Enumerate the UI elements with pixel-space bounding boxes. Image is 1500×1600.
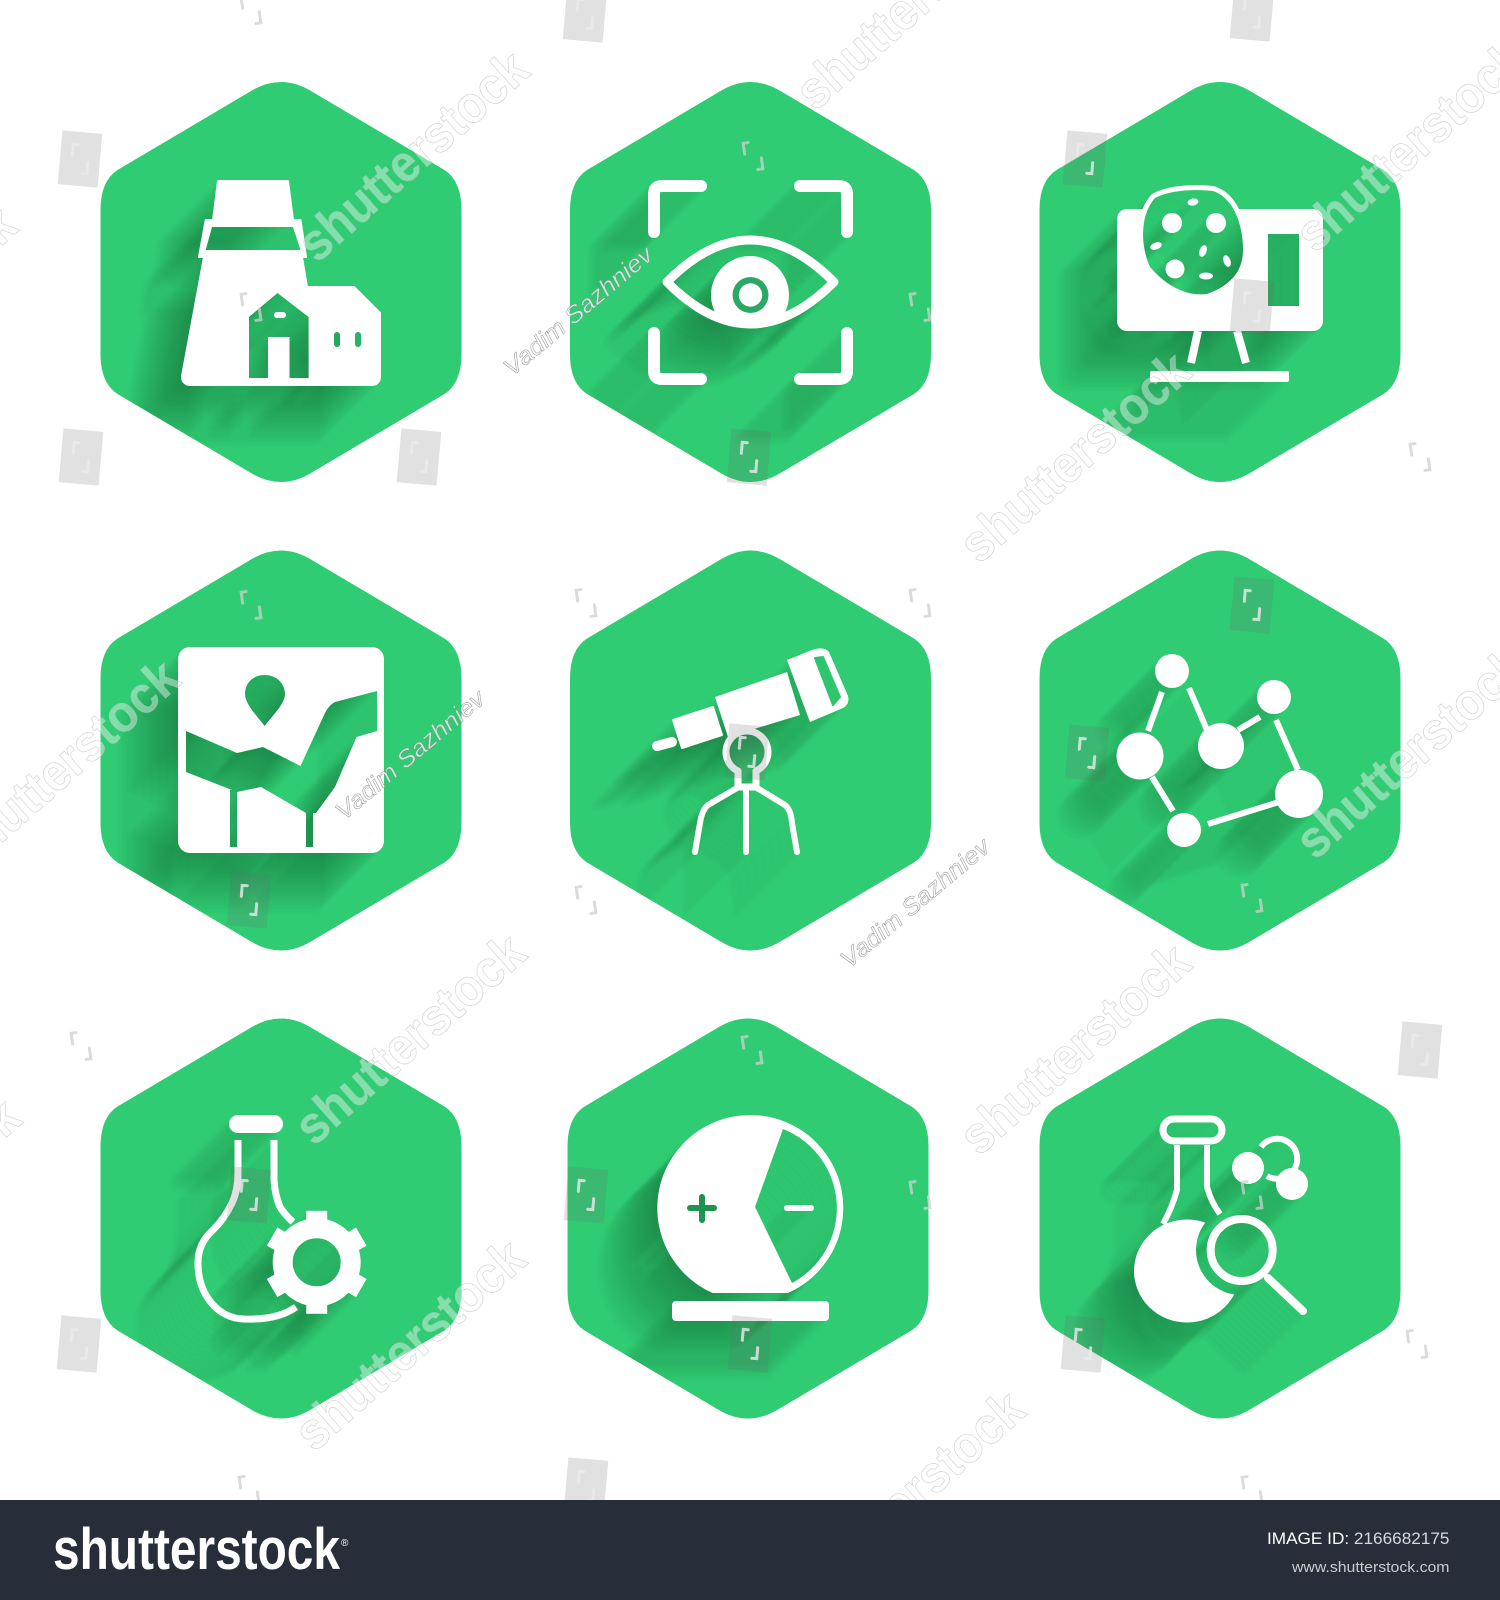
long shadow (654, 186, 847, 379)
long shadow (198, 1115, 367, 1319)
watermark: photographer name: Vadim Sazhniev (331, 684, 492, 826)
watermark: shutterstock diagonal text: shutterstock (287, 39, 540, 273)
watermark: shutterstock diagonal text: shutterstock (284, 922, 537, 1156)
hexagon badge (100, 82, 462, 482)
icon: flask, molecule and magnifier (1134, 1119, 1308, 1322)
panel: flask with magnifier hexagon (1040, 1018, 1400, 1418)
icon: telescope (657, 648, 848, 852)
panel: molecule hexagon (1040, 550, 1400, 950)
icon: eye in scan brackets (654, 186, 847, 379)
image id: IMAGE ID: 2166682175 (1267, 1529, 1450, 1548)
icon: charged sphere (657, 1115, 843, 1321)
hexagon badge (1040, 550, 1400, 950)
website: www.shutterstock.com (1291, 1559, 1450, 1576)
registered mark: ® (341, 1538, 349, 1549)
panel: nuclear power plant hexagon (100, 82, 462, 482)
watermark: shutterstock diagonal text: shutterstock (949, 340, 1202, 574)
watermark: shutterstock diagonal text: shutterstock (284, 1228, 537, 1462)
icon: power plant (182, 181, 380, 385)
panel: telescope hexagon (570, 550, 931, 950)
long shadow (1116, 654, 1323, 847)
panel: flask with gear hexagon (100, 1018, 462, 1418)
icon: flask and gear (198, 1115, 367, 1319)
hexagon badge (100, 1018, 462, 1418)
watermark: photographer name: Vadim Sazhniev (836, 832, 997, 974)
hexagon badge (570, 82, 931, 482)
panel: map with pin hexagon (100, 550, 462, 950)
hexagon badge (1040, 1018, 1400, 1418)
watermark: photographer name: Vadim Sazhniev (499, 240, 660, 382)
long shadow (182, 181, 380, 385)
footer bar (0, 1500, 1500, 1600)
icon: location map (178, 647, 384, 853)
watermark: photographer name (331, 240, 997, 974)
hexagon badge (1040, 82, 1400, 482)
hexagon badge (100, 550, 462, 950)
long shadow (1117, 190, 1323, 382)
panel: plus minus sphere hexagon (568, 1018, 928, 1418)
icon: monitor with bacteria (1117, 190, 1323, 382)
icon: molecule network (1116, 654, 1323, 847)
long shadow (657, 648, 848, 852)
hexagon badge (568, 1018, 928, 1418)
long shadow (1134, 1119, 1308, 1322)
long shadow (657, 1115, 843, 1321)
watermark: shutterstock diagonal text: shutterstock (949, 932, 1202, 1166)
long shadow (178, 647, 384, 853)
panel: microscope monitor hexagon (1040, 82, 1400, 482)
panel: eye scan hexagon (570, 82, 931, 482)
shutterstock logo: shutterstock (53, 1517, 341, 1582)
hexagon badge (570, 550, 931, 950)
